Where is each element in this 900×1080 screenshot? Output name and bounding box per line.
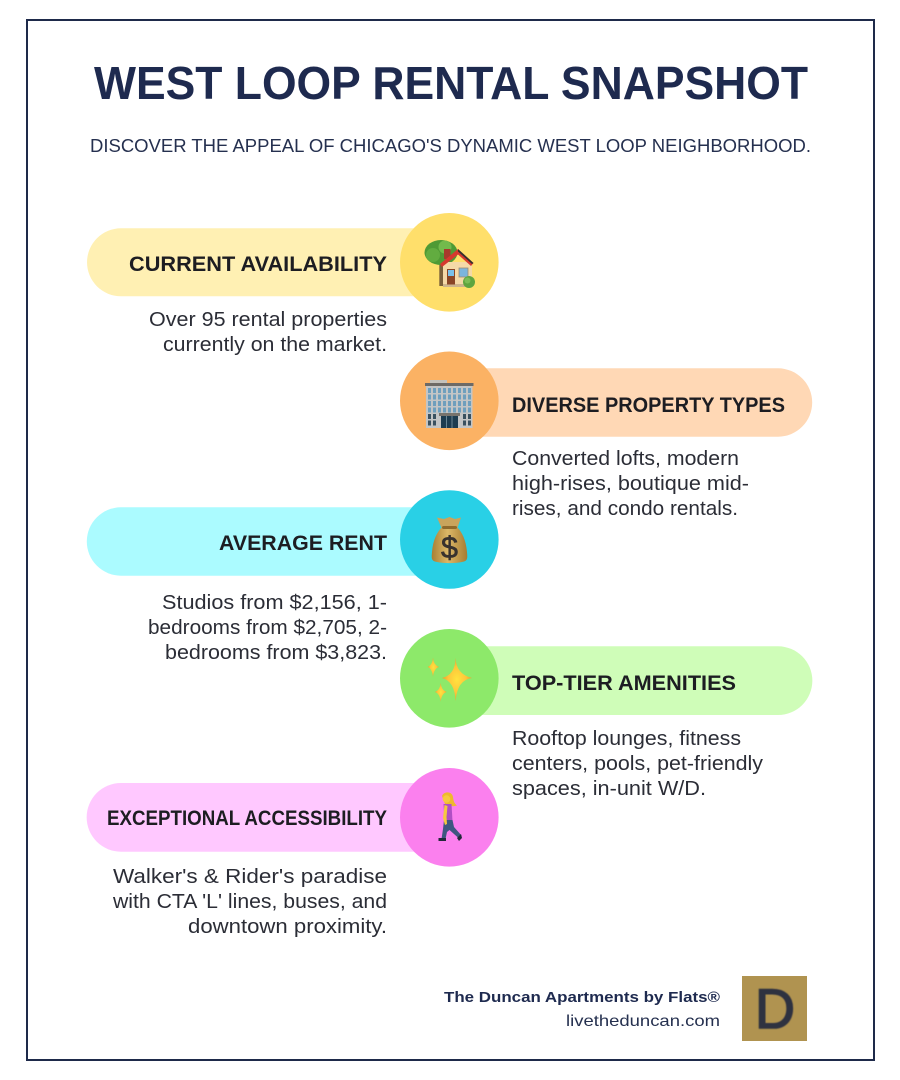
icon: woman walking bbox=[438, 792, 462, 841]
pill: average rent bbox=[87, 507, 450, 576]
icon: money bag bbox=[432, 517, 467, 565]
icon: office building bbox=[425, 380, 474, 428]
heading: diverse property types: DIVERSE PROPERTY TYPES bbox=[512, 394, 785, 417]
text: exceptional accessibility: downtown proximity. bbox=[188, 916, 387, 938]
panel: current availability bbox=[87, 213, 499, 312]
text: average rent: bedrooms from $2,705, 2- bbox=[148, 617, 387, 639]
text: top-tier amenities: centers, pools, pet-friendly bbox=[512, 753, 763, 775]
pill: top-tier amenities bbox=[450, 646, 812, 715]
footer website: livetheduncan.com bbox=[566, 1013, 720, 1030]
pill: current availability bbox=[87, 228, 450, 296]
icon circle: orange bbox=[400, 352, 499, 450]
dollar sign: $ bbox=[441, 530, 458, 565]
pill: diverse property types bbox=[450, 368, 812, 437]
icon circle: cyan bbox=[400, 490, 499, 589]
text: top-tier amenities bbox=[512, 728, 763, 800]
heading: top-tier amenities: TOP-TIER AMENITIES bbox=[512, 672, 736, 695]
subtitle: DISCOVER THE APPEAL OF CHICAGO'S DYNAMIC WEST LOOP NEIGHBORHOOD. bbox=[90, 135, 811, 156]
icon circle: green bbox=[400, 629, 499, 728]
panel: top-tier amenities bbox=[400, 629, 812, 728]
text: average rent: bedrooms from $3,823. bbox=[165, 642, 387, 664]
text: average rent: Studios from $2,156, 1- bbox=[162, 592, 387, 614]
logo bbox=[742, 976, 807, 1041]
text: average rent bbox=[148, 592, 387, 664]
text: top-tier amenities: spaces, in-unit W/D. bbox=[512, 778, 706, 800]
text: exceptional accessibility: Walker's & Rider's paradise bbox=[113, 866, 387, 888]
panel: diverse property types bbox=[400, 352, 812, 450]
footer brand name: The Duncan Apartments by Flats® bbox=[444, 989, 720, 1006]
text: current availability bbox=[149, 309, 387, 356]
icon circle: yellow bbox=[400, 213, 499, 312]
text: current availability: currently on the market. bbox=[163, 334, 387, 356]
heading: current availability: CURRENT AVAILABILITY bbox=[129, 253, 387, 276]
title: WEST LOOP RENTAL SNAPSHOT bbox=[94, 57, 808, 109]
text: exceptional accessibility bbox=[112, 866, 387, 938]
text: diverse property types: Converted lofts, modern bbox=[512, 448, 739, 470]
text: diverse property types bbox=[512, 448, 749, 520]
pill: exceptional accessibility bbox=[87, 783, 450, 852]
panel: exceptional accessibility bbox=[87, 768, 499, 867]
text: diverse property types: high-rises, boutique mid- bbox=[512, 473, 749, 495]
text: current availability: Over 95 rental properties bbox=[149, 309, 387, 331]
panel: average rent bbox=[87, 490, 499, 589]
icon: sparkles bbox=[428, 658, 472, 702]
text: top-tier amenities: Rooftop lounges, fitness bbox=[512, 728, 741, 750]
heading: average rent: AVERAGE RENT bbox=[219, 532, 387, 555]
text: diverse property types: rises, and condo rentals. bbox=[512, 498, 738, 520]
icon: house with tree bbox=[424, 240, 475, 288]
text: exceptional accessibility: with CTA 'L' lines, buses, and bbox=[112, 891, 387, 913]
logo: D bbox=[755, 977, 795, 1040]
icon circle: pink bbox=[400, 768, 499, 867]
heading: exceptional accessibility: EXCEPTIONAL ACCESSIBILITY bbox=[107, 807, 387, 830]
